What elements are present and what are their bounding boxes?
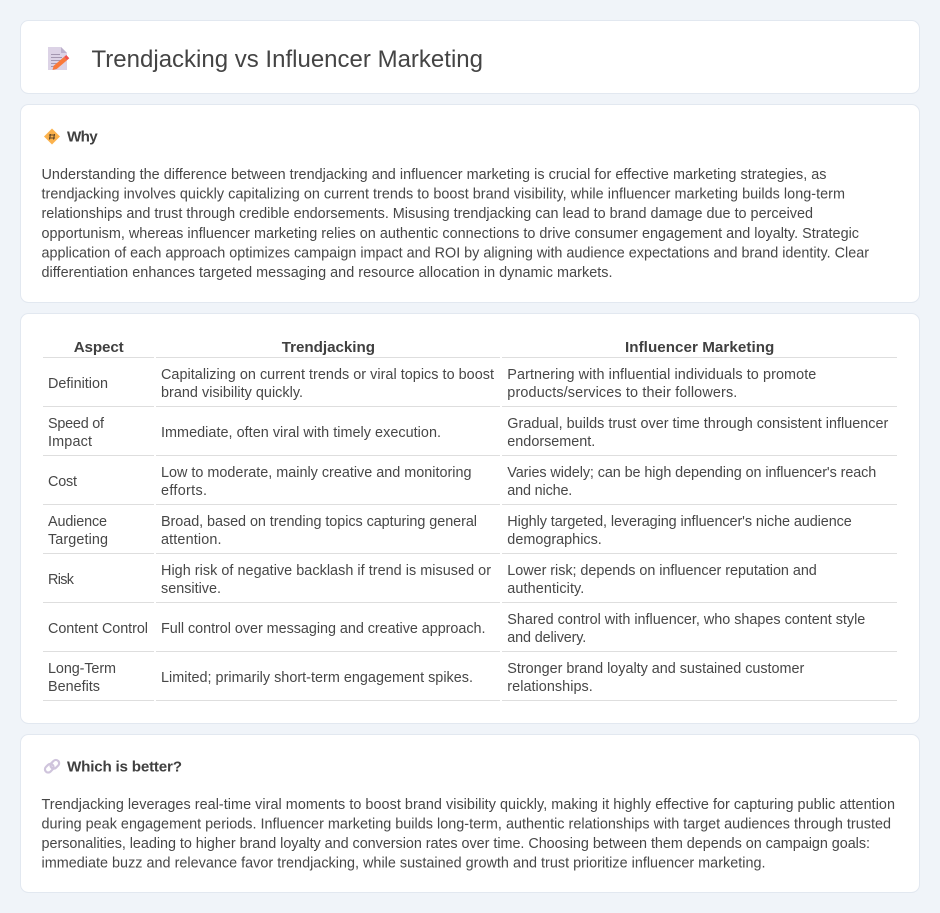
row: risk: Risk — [48, 572, 75, 588]
row: risk: Lower risk; depends on influencer reputation and — [507, 563, 817, 579]
row: long-term benefits: relationships. — [507, 679, 593, 695]
text block: why paragraph: differentiation enhances targeted messaging and resource allocation in dynamic markets. — [42, 265, 612, 281]
row: definition: brand visibility quickly. — [161, 385, 303, 401]
row: cost: Varies widely; can be high depending on influencer's reach — [507, 465, 876, 481]
row: audience targeting: Audience — [48, 514, 107, 530]
table header row: Aspect — [74, 339, 124, 356]
row: long-term benefits: Long-Term — [48, 661, 116, 677]
panel: header — [20, 20, 920, 94]
row: content control: Content Control — [48, 621, 148, 637]
text block: verdict paragraph: during peak engagement periods. Influencer marketing builds long-term, authentic relationships with target audiences through trusted — [42, 816, 891, 832]
row: definition: Partnering with influential individuals to promote — [507, 367, 816, 383]
heading: why: Why — [67, 129, 98, 146]
row: content control: Shared control with influencer, who shapes content style — [507, 612, 865, 628]
row: cost: efforts. — [161, 483, 207, 499]
row: long-term benefits: Stronger brand loyalty and sustained customer — [507, 661, 805, 677]
text block: why paragraph: Understanding the difference between trendjacking and influencer marketing is crucial for effective marketing strategies, as — [42, 167, 826, 183]
row: content control: and delivery. — [507, 630, 586, 646]
icon: link — [44, 759, 60, 774]
text block: why paragraph: application of each approach optimizes campaign impact and ROI by aligning with audience expectations and brand identity. Clear — [42, 245, 869, 261]
row: audience targeting: Highly targeted, leveraging influencer's niche audience — [507, 514, 852, 530]
icon: memo with pencil — [48, 47, 69, 70]
text block: verdict paragraph — [42, 797, 895, 872]
row: cost: Low to moderate, mainly creative and monitoring — [161, 465, 472, 481]
row: audience targeting: Broad, based on trending topics capturing general — [161, 514, 477, 530]
title: Trendjacking vs Influencer Marketing — [92, 46, 483, 73]
row: cost — [43, 465, 897, 505]
row: speed of impact: Gradual, builds trust over time through consistent influencer — [507, 416, 889, 432]
text block: why paragraph — [42, 167, 869, 281]
text block: verdict paragraph: Trendjacking leverages real-time viral moments to boost brand visibility quickly, making it highly effective for capturing public attention — [42, 797, 895, 813]
panel: why — [20, 104, 920, 302]
row: content control — [43, 612, 897, 652]
table header row — [43, 339, 897, 358]
row: definition: products/services to their followers. — [507, 385, 737, 401]
table header row: Influencer Marketing — [625, 339, 774, 356]
text block: verdict paragraph: personalities, leading to higher brand loyalty and conversion rates over time. Choosing between them depends on campaign goals: — [42, 836, 870, 852]
row: speed of impact: Speed of — [48, 416, 105, 432]
row: speed of impact: Impact — [48, 434, 92, 450]
row: definition: Definition — [48, 376, 108, 392]
panel: which is better — [20, 734, 920, 892]
row: long-term benefits: Benefits — [48, 679, 100, 695]
row: audience targeting: Targeting — [48, 532, 108, 548]
text block: verdict paragraph: immediate buzz and relevance favor trendjacking, while sustained growth and trust prioritize influencer marketing. — [42, 856, 766, 872]
row: cost: Cost — [48, 474, 77, 490]
row: risk: sensitive. — [161, 581, 221, 597]
icon: warning diamond — [44, 128, 60, 144]
text block: why paragraph: trendjacking involves quickly capitalizing on current trends to boost brand visibility, while influencer marketing builds long-term — [42, 187, 845, 203]
row: long-term benefits — [43, 661, 897, 701]
text block: why paragraph: relationships and trust through credible endorsements. Misusing trendjacking can lead to brand damage due to perceived — [42, 206, 813, 222]
heading: which is better: Which is better? — [67, 759, 182, 776]
row: definition — [43, 367, 897, 407]
row: risk: High risk of negative backlash if trend is misused or — [161, 563, 491, 579]
row: speed of impact: endorsement. — [507, 434, 595, 450]
row: cost: and niche. — [507, 483, 572, 499]
row: speed of impact — [43, 416, 897, 456]
row: risk — [43, 563, 897, 603]
row: audience targeting: demographics. — [507, 532, 602, 548]
row: content control: Full control over messaging and creative approach. — [161, 621, 486, 637]
text block: why paragraph: opportunism, whereas influencer marketing relies on authentic connections to drive consumer engagement and loyalty. Strategic — [42, 226, 859, 242]
panel: comparison table — [20, 314, 920, 724]
row: audience targeting — [43, 514, 897, 554]
row: speed of impact: Immediate, often viral with timely execution. — [161, 425, 441, 441]
row: definition: Capitalizing on current trends or viral topics to boost — [161, 367, 494, 383]
row: risk: authenticity. — [507, 581, 584, 597]
table header row: Trendjacking — [282, 339, 375, 356]
row: audience targeting: attention. — [161, 532, 222, 548]
row: long-term benefits: Limited; primarily short-term engagement spikes. — [161, 670, 473, 686]
